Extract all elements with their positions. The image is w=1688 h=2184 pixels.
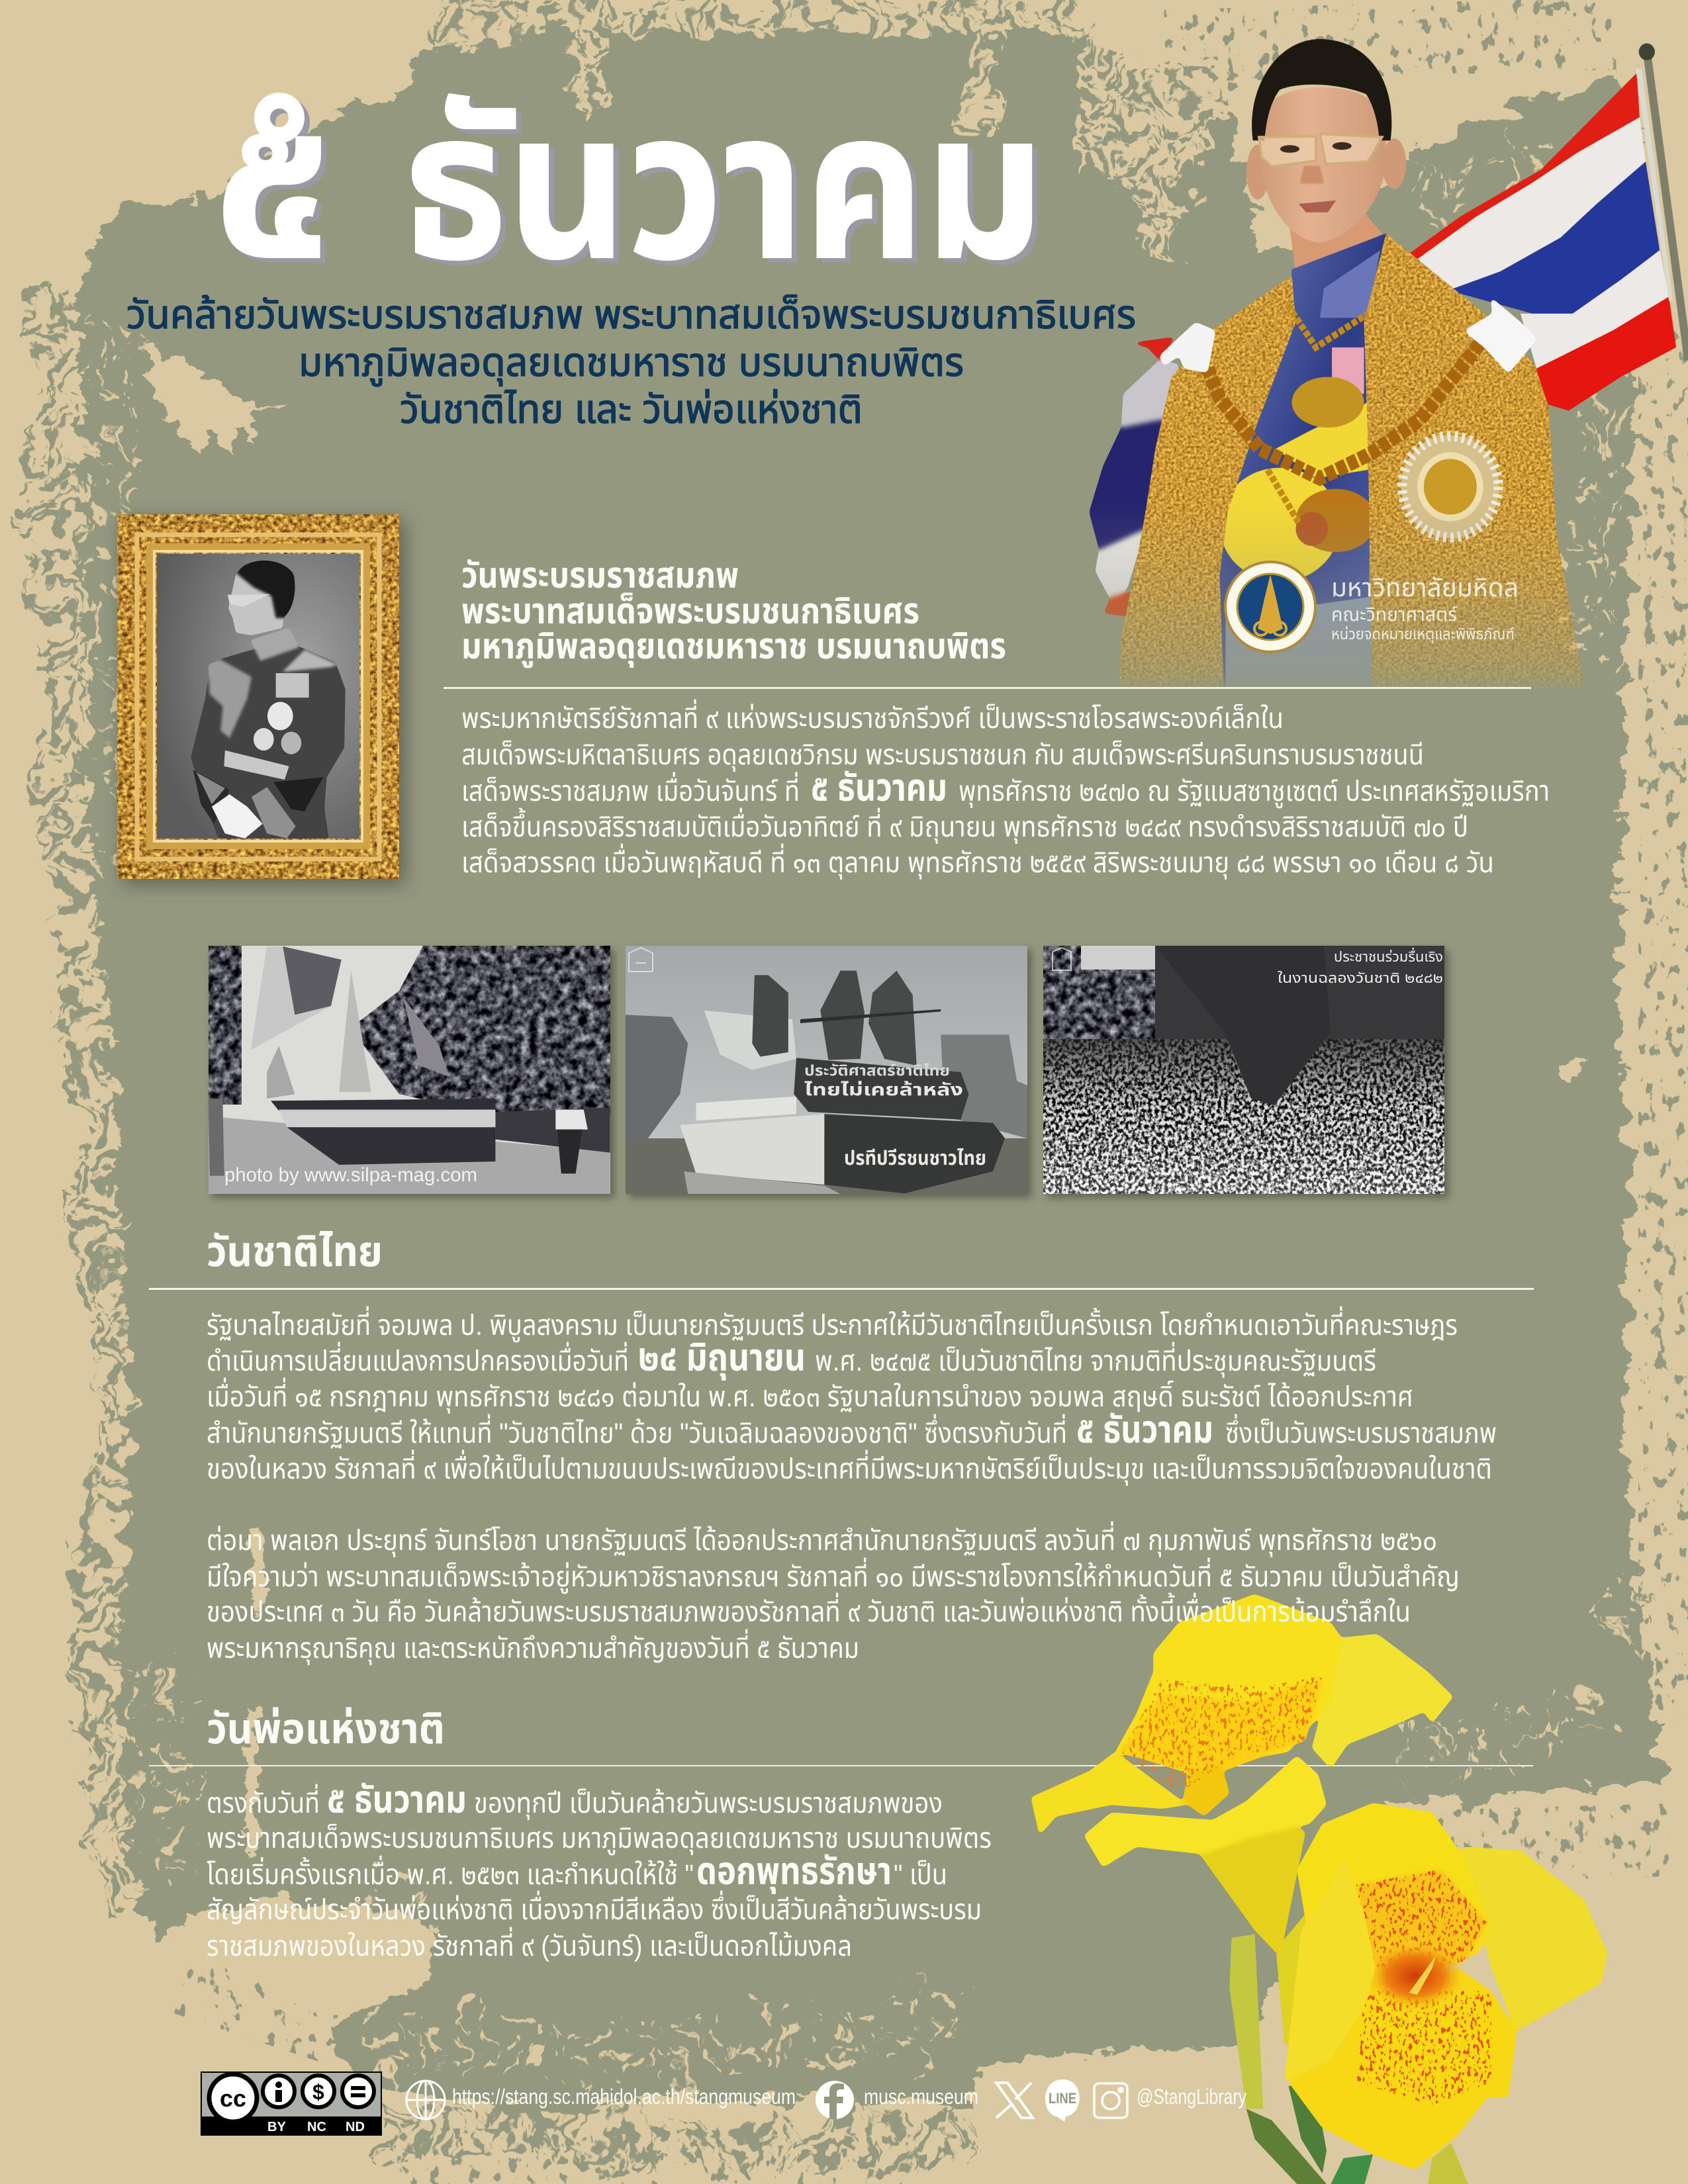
- icon: facebook: [816, 2081, 854, 2119]
- National Day paragraph 2: ของประเทศ ๓ วัน คือ วันคล้ายวันพระบรมราชสมภพของรัชกาลที่ ๙ วันชาติ และวันพ่อแห่งชาติ ทั้งนี้เพื่อเป็นการน้อมรำลึกใน: [207, 1592, 1411, 1628]
- National Day paragraph 2: มีใจความว่า พระบาทสมเด็จพระเจ้าอยู่หัวมหาวชิราลงกรณฯ รัชกาลที่ ๑๐ มีพระราชโองการให้กำหนดวันที่ ๕ ธันวาคม เป็นวันสำคัญ: [207, 1557, 1460, 1594]
- gold chain: [1207, 343, 1480, 478]
- heading: National Day: วันชาติไทย: [207, 1228, 383, 1275]
- National Day paragraph 1: ซึ่งเป็นวันพระบรมราชสมภพ: [1225, 1414, 1497, 1449]
- heading: birth anniversary: [461, 556, 1006, 668]
- logo text: คณะวิทยาศาสตร์: [1331, 604, 1458, 625]
- gold robe: [1115, 229, 1589, 690]
- subtitle: วันคล้ายวันพระบรมราชสมภพ พระบาทสมเด็จพระบรมชนกาธิเบศร: [126, 293, 1136, 337]
- biography text: สมเด็จพระมหิตลาธิเบศร อดุลยเดชวิกรม พระบรมราชชนก กับ สมเด็จพระศรีนครินทราบรมราชชนนี: [461, 739, 1424, 772]
- icon: instagram: [1094, 2083, 1127, 2118]
- heading: birth anniversary: วันพระบรมราชสมภพ: [461, 556, 739, 596]
- star medal: [1401, 435, 1499, 538]
- icon: globe: [406, 2081, 445, 2119]
- National Day paragraph 2: พระมหากรุณาธิคุณ และตระหนักถึงความสำคัญของวันที่ ๕ ธันวาคม: [207, 1629, 859, 1665]
- heading: birth anniversary: มหาภูมิพลอดุยเดชมหาราช บรมนาถบพิตร: [461, 627, 1006, 668]
- Father's Day paragraph: ของทุกปี เป็นวันคล้ายวันพระบรมราชสมภพของ: [474, 1788, 943, 1820]
- white bows: [1160, 296, 1537, 373]
- National Day paragraph 1: สำนักนายกรัฐมนตรี ให้แทนที่ "วันชาติไทย" ด้วย "วันเฉลิมฉลองของชาติ" ซึ่งตรงกับวันที่: [207, 1414, 1067, 1449]
- book lettering: ประวัติศาสตร์ชาติไทย: [804, 1062, 950, 1079]
- icon: creative commons badge: ND: [346, 2120, 365, 2134]
- photo credit: photo by www.silpa-mag.com: [224, 1164, 477, 1186]
- icon: creative commons badge: BY: [267, 2120, 286, 2134]
- background: green specks on tan: [50, 17, 1086, 2141]
- icon: LINE: [1045, 2079, 1080, 2122]
- upper flower: [1031, 1594, 1453, 1957]
- biography text: เสด็จสวรรคต เมื่อวันพฤหัสบดี ที่ ๑๓ ตุลาคม พุทธศักราช ๒๕๕๙ สิริพระชนมายุ ๘๘ พรรษา ๑๐ เดือน ๘ วัน: [461, 843, 1494, 880]
- logo text: มหาวิทยาลัยมหิดล: [1331, 574, 1519, 602]
- Father's Day paragraph: ๕ ธันวาคม: [327, 1778, 467, 1821]
- icon: creative commons badge: cc: [220, 2085, 246, 2112]
- neck and collar: [1288, 212, 1382, 275]
- National Day paragraph 1: ๒๔ มิถุนายน: [638, 1336, 806, 1381]
- flag behind shoulder: [1402, 73, 1676, 411]
- icon: creative commons badge: NC: [307, 2120, 326, 2134]
- flowers: yellow canna: [1031, 1594, 1607, 2184]
- National Day paragraph 2: [207, 1521, 1460, 1665]
- heading: National Father's Day: วันพ่อแห่งชาติ: [207, 1705, 445, 1752]
- Father's Day paragraph: " เป็น: [894, 1859, 947, 1891]
- website link: https://stang.sc.mahidol.ac.th/stangmuseum: [452, 2085, 796, 2109]
- Father's Day paragraph: ตรงกับวันที่: [207, 1784, 320, 1819]
- icon: creative commons badge: [201, 2072, 381, 2135]
- background: tan drips: [185, 1059, 1590, 2019]
- logo text: หน่วยจดหมายเหตุและพิพิธภัณฑ์: [1331, 625, 1515, 643]
- Father's Day paragraph: สัญลักษณ์ประจำวันพ่อแห่งชาติ เนื่องจากมีสีเหลือง ซึ่งเป็นสีวันคล้ายวันพระบรม: [207, 1890, 982, 1926]
- Father's Day paragraph: โดยเริ่มครั้งแรกเมื่อ พ.ศ. ๒๕๒๓ และกำหนดให้ใช้ ": [207, 1855, 694, 1891]
- National Day paragraph 1: ดำเนินการเปลี่ยนแปลงการปกครองเมื่อวันที่: [207, 1342, 629, 1377]
- Father's Day paragraph: พระบาทสมเด็จพระบรมชนกาธิเบศร มหาภูมิพลอดุลยเดชมหาราช บรมนาถบพิตร: [207, 1823, 992, 1855]
- photo: soldiers monument on books: [626, 946, 1031, 1198]
- National Day paragraph 1: ของในหลวง รัชกาลที่ ๙ เพื่อให้เป็นไปตามขนบประเพณีของประเทศที่มีพระมหากษัตริย์เป็นประมุข และเป็นการรวมจิตใจของคนในชาติ: [207, 1449, 1492, 1486]
- king portrait with flag: [1089, 39, 1688, 690]
- National Day paragraph 1: พ.ศ. ๒๔๗๕ เป็นวันชาติไทย จากมติที่ประชุมคณะรัฐมนตรี: [815, 1342, 1376, 1378]
- photo: parade: [209, 946, 614, 1198]
- National Day paragraph 1: ๕ ธันวาคม: [1076, 1408, 1213, 1451]
- logo text: [1331, 574, 1519, 643]
- photo: soldiers monument on books: ไทยไม่เคยล้าหลัง: [804, 1079, 963, 1099]
- flag draped left: [1089, 337, 1232, 617]
- title: ๕ ธันวาคม: ๕: [214, 71, 332, 302]
- background: tan specks over green: [113, 152, 1655, 2052]
- icon: X: [996, 2083, 1033, 2118]
- photo: crowd under trees: [1043, 946, 1448, 1198]
- head: [1246, 39, 1406, 243]
- lower flower spots: [1356, 1870, 1491, 2105]
- subtitle: [126, 293, 1136, 432]
- heading: birth anniversary: พระบาทสมเด็จพระบรมชนกาธิเบศร: [461, 592, 919, 631]
- background: tan worn patches: [565, 33, 1225, 258]
- photo caption: ประชาชนร่วมรื่นเริง: [1334, 947, 1443, 965]
- biography text: พุทธศักราช ๒๔๗๐ ณ รัฐแมสซาชูเซตต์ ประเทศสหรัฐอเมริกา: [959, 776, 1550, 808]
- crowd texture: [1043, 1039, 1444, 1194]
- frame shadow: [122, 520, 404, 884]
- Father's Day paragraph: ดอกพุทธรักษา: [696, 1850, 892, 1894]
- flagpole: [1647, 52, 1688, 360]
- stems: [1229, 1911, 1468, 2184]
- biography text: เสด็จขึ้นครองสิริราชสมบัติเมื่อวันอาทิตย์ ที่ ๙ มิถุนายน พุทธศักราช ๒๔๘๙ ทรงดำรงสิริราชสมบัติ ๗๐ ปี: [461, 807, 1468, 844]
- icon: LINE: LINE: [1049, 2090, 1076, 2107]
- National Day paragraph 2: ต่อมา พลเอก ประยุทธ์ จันทร์โอชา นายกรัฐมนตรี ได้ออกประกาศสำนักนายกรัฐมนตรี ลงวันที่ ๗ กุมภาพันธ์ พุทธศักราช ๒๕๖๐: [207, 1521, 1437, 1557]
- lower flower left petal: [1284, 1854, 1375, 2082]
- head: [228, 561, 295, 635]
- black and white portrait photo: [157, 554, 359, 839]
- biography text: ๕ ธันวาคม: [811, 766, 947, 809]
- inner garment: [1219, 234, 1386, 688]
- National Day paragraph 1: [207, 1306, 1497, 1486]
- biography text: เสด็จพระราชสมภพ เมื่อวันจันทร์ ที่: [461, 772, 800, 807]
- Father's Day paragraph: ราชสมภพของในหลวง รัชกาลที่ ๙ (วันจันทร์) และเป็นดอกไม้มงคล: [207, 1927, 852, 1962]
- subtitle: มหาภูมิพลอดุลยเดชมหาราช บรมนาถบพิตร: [299, 340, 964, 387]
- photo: crowd under trees: ในงานฉลองวันชาติ ๒๔๘๒: [1278, 971, 1443, 986]
- photo: soldiers monument on books: ปรทีปวีรชนชาวไทย: [844, 1148, 986, 1169]
- flower throat: [1362, 1940, 1468, 2012]
- biography text: พระมหากษัตริย์รัชกาลที่ ๙ แห่งพระบรมราชจักรีวงศ์ เป็นพระราชโอรสพระองค์เล็กใน: [461, 699, 1284, 735]
- glasses: [1259, 136, 1316, 167]
- medals on chest: [1332, 347, 1364, 394]
- gold frame: [117, 514, 399, 879]
- uniform: [191, 628, 346, 839]
- title: ๕ ธันวาคม: ธันวาคม: [403, 71, 1045, 302]
- subtitle: วันชาติไทย และ วันพ่อแห่งชาติ: [400, 387, 863, 432]
- National Day paragraph 1: รัฐบาลไทยสมัยที่ จอมพล ป. พิบูลสงคราม เป็นนายกรัฐมนตรี ประกาศให้มีวันชาติไทยเป็นครั้งแรก โดยกำหนดเอาวันที่คณะราษฎร: [207, 1306, 1458, 1342]
- Father's Day paragraph: [207, 1778, 992, 1962]
- social handle: @StangLibrary: [1137, 2085, 1246, 2109]
- facebook name: musc.museum: [864, 2085, 978, 2109]
- stamen: [1409, 1955, 1436, 1995]
- lower flower: [1289, 1803, 1607, 2169]
- background: tan splatter blob: [149, 339, 291, 460]
- National Day paragraph 1: เมื่อวันที่ ๑๕ กรกฎาคม พุทธศักราช ๒๔๘๑ ต่อมาใน พ.ศ. ๒๕๐๓ รัฐบาลในการนำของ จอมพล สฤษดิ์ ธนะรัชต์ ได้ออกประกาศ: [207, 1377, 1413, 1414]
- upper flower spots: [1119, 1676, 1323, 1794]
- biography text: [461, 699, 1550, 880]
- icon: creative commons badge: $: [312, 2080, 324, 2104]
- framed royal portrait: [117, 514, 404, 884]
- logo: Mahidol University seal: [1225, 562, 1315, 652]
